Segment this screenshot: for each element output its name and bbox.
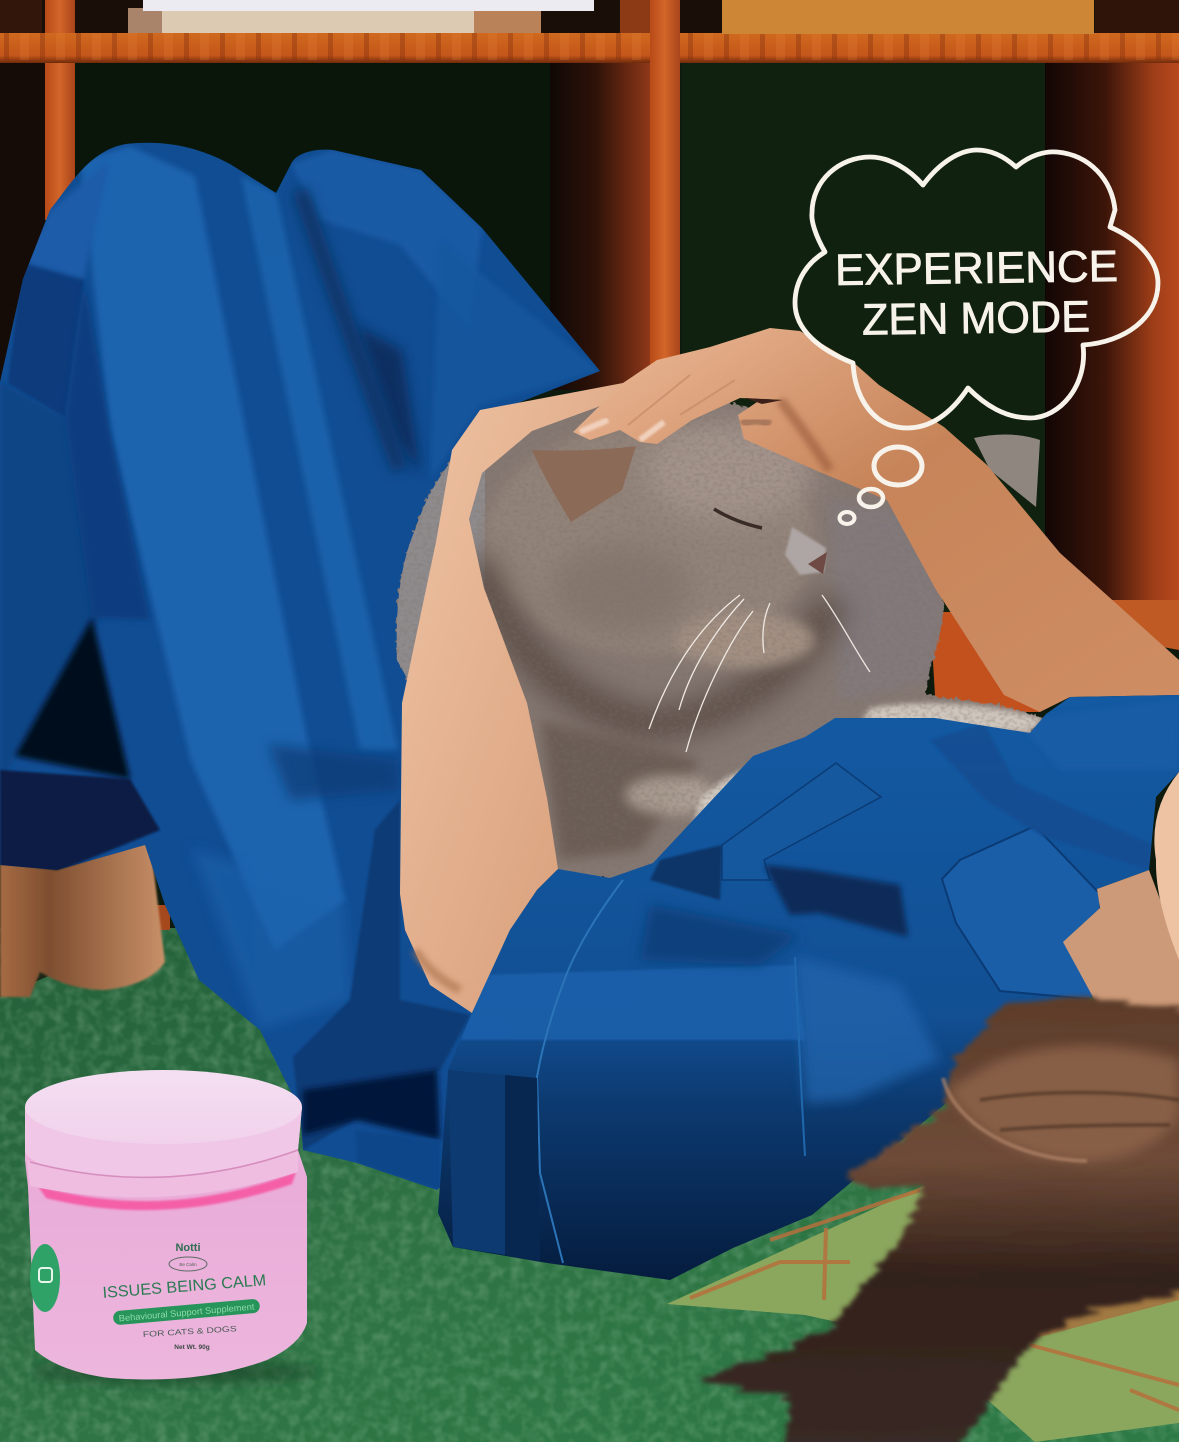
cat ear [532,446,636,522]
jar brand: Notti [175,1242,201,1254]
shirt cuff seam [537,880,623,1263]
left arm hugging the cat [400,383,625,1013]
hair [702,996,1179,1442]
jar silhouette [25,1107,307,1380]
books on shelf [128,0,594,33]
jar neck [27,1150,298,1197]
cat [395,400,1055,880]
feet [0,840,165,997]
pajama shirt [438,695,1179,1280]
thought bubbles [840,447,922,524]
jar subtitle pill: Behavioural Support Supplement [118,1302,255,1323]
carpet [0,905,1179,1442]
cloud text: ZEN MODE [862,292,1090,345]
jar small label [169,1257,207,1271]
skin at chest and neck [1063,772,1179,1040]
hair highlight [948,1046,1179,1161]
wooden box on shelf [722,0,1094,34]
jar title: ISSUES BEING CALM [102,1272,267,1302]
jar shadow [30,1360,320,1384]
shirt collar [942,826,1100,1000]
jar lid [25,1107,302,1178]
jar badge [30,1244,60,1312]
jar small label: Be Calm [179,1262,197,1267]
thought cloud [795,150,1158,428]
pillow [667,1185,1179,1442]
jar neck gloss [38,1172,296,1210]
right arm and petting hand [573,328,1179,712]
cloud text: EXPERIENCE [835,242,1118,295]
plant pot [974,434,1040,507]
pajama trousers [0,143,600,1190]
jar weight: Net Wt. 90g [174,1344,210,1351]
jar audience line: FOR CATS & DOGS [143,1324,237,1339]
cloud text [835,242,1118,345]
shirt sleeve band [460,965,805,1040]
product jar [25,1070,320,1384]
cat face [649,509,870,752]
